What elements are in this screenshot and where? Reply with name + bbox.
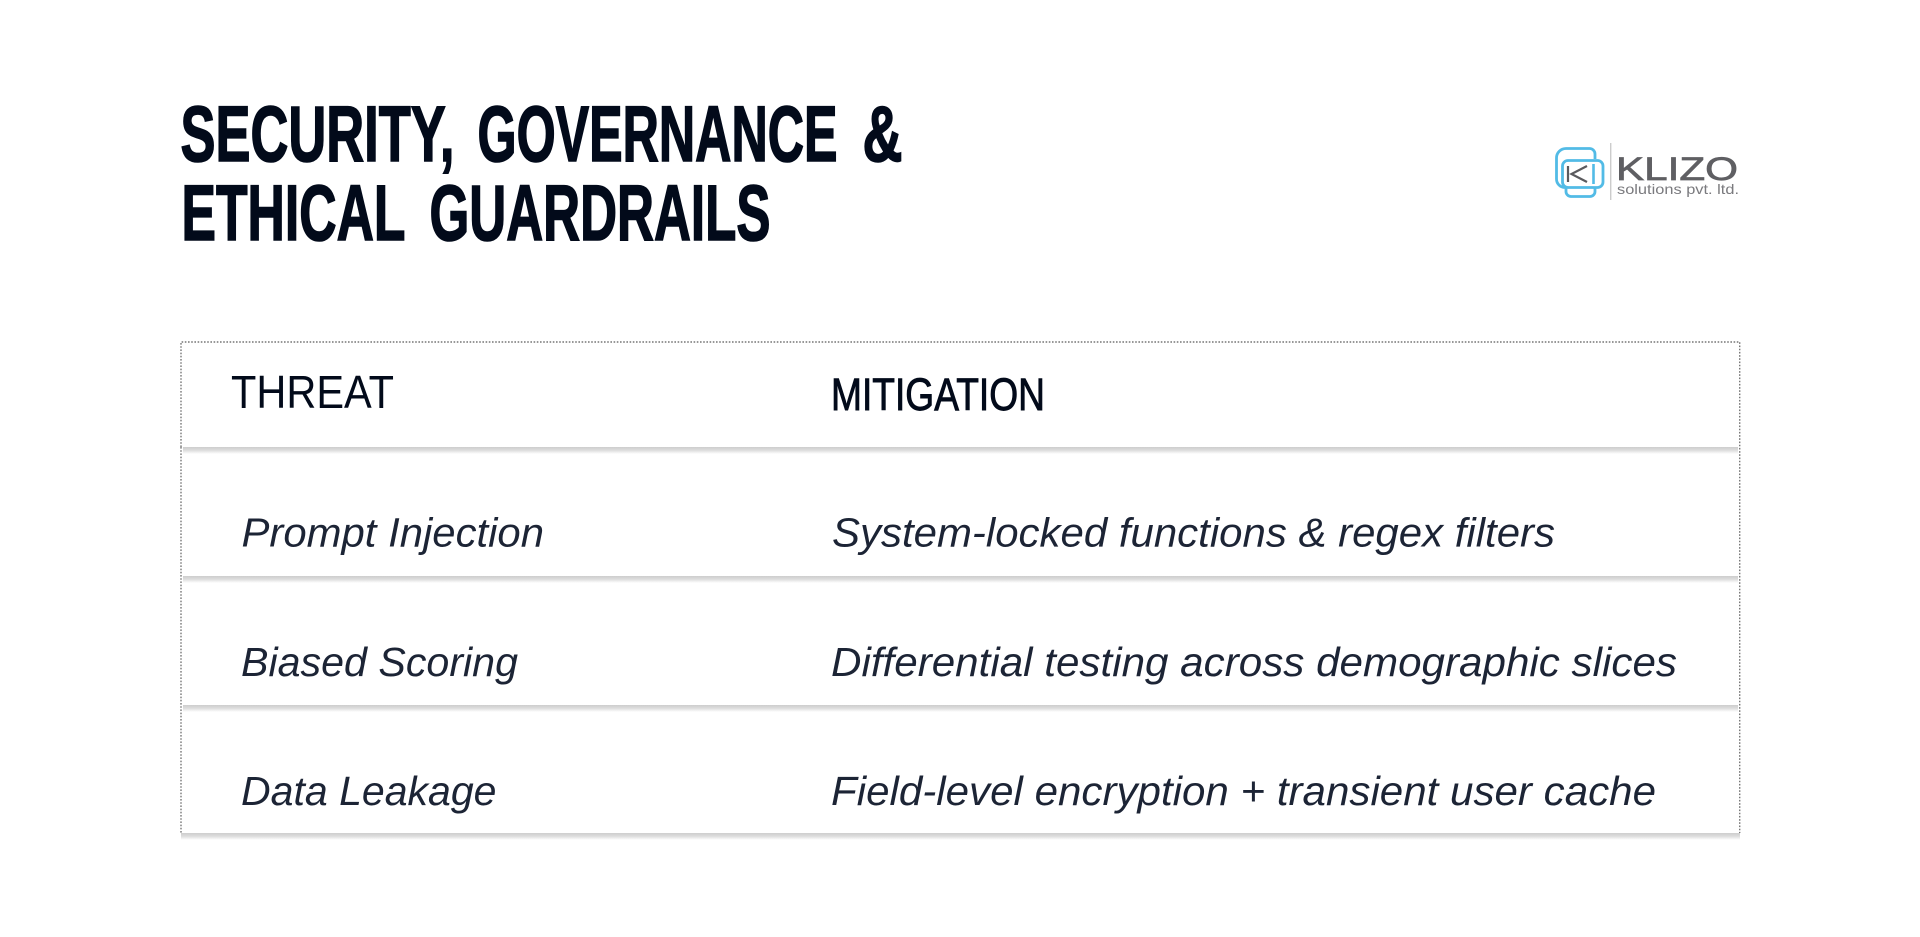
logo: Klizo: KLIZO — [1616, 151, 1738, 187]
table header: MITIGATION — [831, 369, 1045, 420]
row: biased scoring: Differential testing across demographic slices — [831, 639, 1677, 685]
logo: Klizo — [1556, 143, 1739, 200]
row: data leakage — [241, 768, 1656, 814]
row: prompt injection: System-locked functions & regex filters — [832, 510, 1555, 556]
title: & — [862, 89, 902, 178]
row: prompt injection: Prompt Injection — [242, 510, 544, 556]
table — [181, 342, 1740, 840]
row: data leakage: Data Leakage — [241, 768, 496, 814]
logo: Klizo: solutions pvt. ltd. — [1617, 181, 1739, 197]
row: biased scoring: Biased Scoring — [241, 639, 518, 685]
row: data leakage: Field-level encryption + transient user cache — [831, 768, 1656, 814]
table header — [231, 366, 1045, 420]
title: ETHICAL — [182, 168, 406, 257]
row: biased scoring — [241, 639, 1677, 685]
title: SECURITY, — [180, 89, 454, 178]
icon: Klizo mark — [1556, 148, 1603, 196]
title — [180, 89, 902, 257]
title: GUARDRAILS — [430, 168, 770, 257]
title: GOVERNANCE — [478, 89, 838, 178]
table header: THREAT — [231, 366, 394, 418]
row: prompt injection — [242, 510, 1555, 556]
